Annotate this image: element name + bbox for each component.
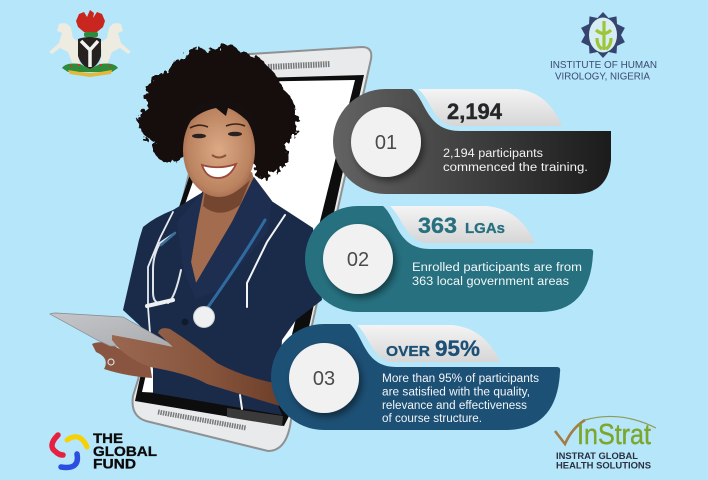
logo: The Global Fund (52, 431, 157, 472)
card 01 description: 2,194 participants (443, 148, 543, 160)
green base (62, 64, 118, 72)
yellow arc (67, 437, 87, 447)
logo: Nigerian coat of arms (49, 10, 131, 77)
emblem oval (589, 18, 617, 52)
neck shadow (203, 180, 250, 213)
neck (191, 172, 254, 283)
wordmark: THE (93, 431, 123, 446)
card 03 heading: 95% (435, 336, 480, 361)
shield (78, 37, 101, 69)
smile (202, 164, 236, 178)
swoosh (585, 416, 656, 428)
card 01 shape (333, 89, 611, 194)
card 02 description: Enrolled participants are from (412, 262, 582, 274)
jacket (123, 175, 322, 415)
emblem figures (596, 21, 611, 50)
card 01 heading tab (418, 89, 562, 126)
card 03 (271, 324, 560, 430)
ring (108, 359, 114, 365)
jacket button (182, 318, 188, 326)
star emblem (581, 12, 625, 58)
red arc (52, 435, 63, 455)
card 03 heading tab (357, 325, 500, 362)
card 03 badge (289, 343, 359, 413)
card 02 (305, 206, 593, 312)
card 03 heading: OVER (386, 344, 431, 360)
hair (138, 44, 299, 179)
card 03 number: 03 (313, 368, 335, 390)
eyes and brows (190, 124, 245, 158)
card 01 number: 01 (375, 132, 397, 154)
institute name: INSTITUTE OF HUMAN (550, 59, 657, 71)
company name: INSTRAT GLOBAL (556, 451, 639, 461)
card 01 badge (351, 107, 421, 177)
check mark and swoosh (555, 420, 585, 444)
logo: Institute of Human Virology, Nigeria (550, 12, 657, 82)
nurse photo illustration (50, 44, 322, 415)
torse (84, 32, 98, 37)
card 03 description: relevance and effectiveness (382, 400, 527, 412)
card 02 heading tab (390, 206, 535, 243)
lower hand (92, 342, 152, 378)
card 02 description: 363 local government areas (412, 276, 569, 288)
institute name: VIROLOGY, NIGERIA (555, 70, 650, 82)
stethoscope head (194, 306, 214, 328)
jacket piping and stethoscope (147, 212, 285, 409)
face (183, 103, 255, 197)
right horse (98, 23, 131, 65)
card 02 shape (305, 206, 593, 312)
InStrat wordmark: InStrat (577, 419, 651, 451)
company name: HEALTH SOLUTIONS (556, 460, 651, 470)
fringe (183, 100, 256, 130)
shield pall (81, 41, 98, 67)
card 02 badge (323, 224, 393, 294)
wordmark: FUND (93, 456, 136, 472)
forearm and upper hand (112, 328, 280, 406)
blue arc (61, 454, 77, 467)
card 02 number: 02 (347, 249, 369, 271)
logo: InStrat Global Health Solutions (555, 416, 656, 470)
left horse (49, 23, 82, 65)
card 03 description: More than 95% of participants (382, 373, 539, 385)
card 01 heading: 2,194 (447, 99, 503, 124)
base flowers (70, 65, 111, 66)
motto banner (68, 70, 112, 77)
collar (177, 177, 272, 299)
card 02 heading: 363 (418, 213, 457, 238)
card 01 (333, 89, 611, 194)
tablet (50, 313, 173, 348)
card 03 description: of course structure. (382, 413, 482, 425)
card 03 shape (271, 324, 560, 430)
card 01 description: commenced the training. (443, 162, 588, 174)
wordmark: GLOBAL (93, 444, 157, 459)
card 03 description: are satisfied with the quality, (382, 386, 530, 398)
card 02 heading: LGAs (465, 221, 505, 237)
smartphone (133, 47, 371, 451)
eagle (76, 10, 105, 32)
